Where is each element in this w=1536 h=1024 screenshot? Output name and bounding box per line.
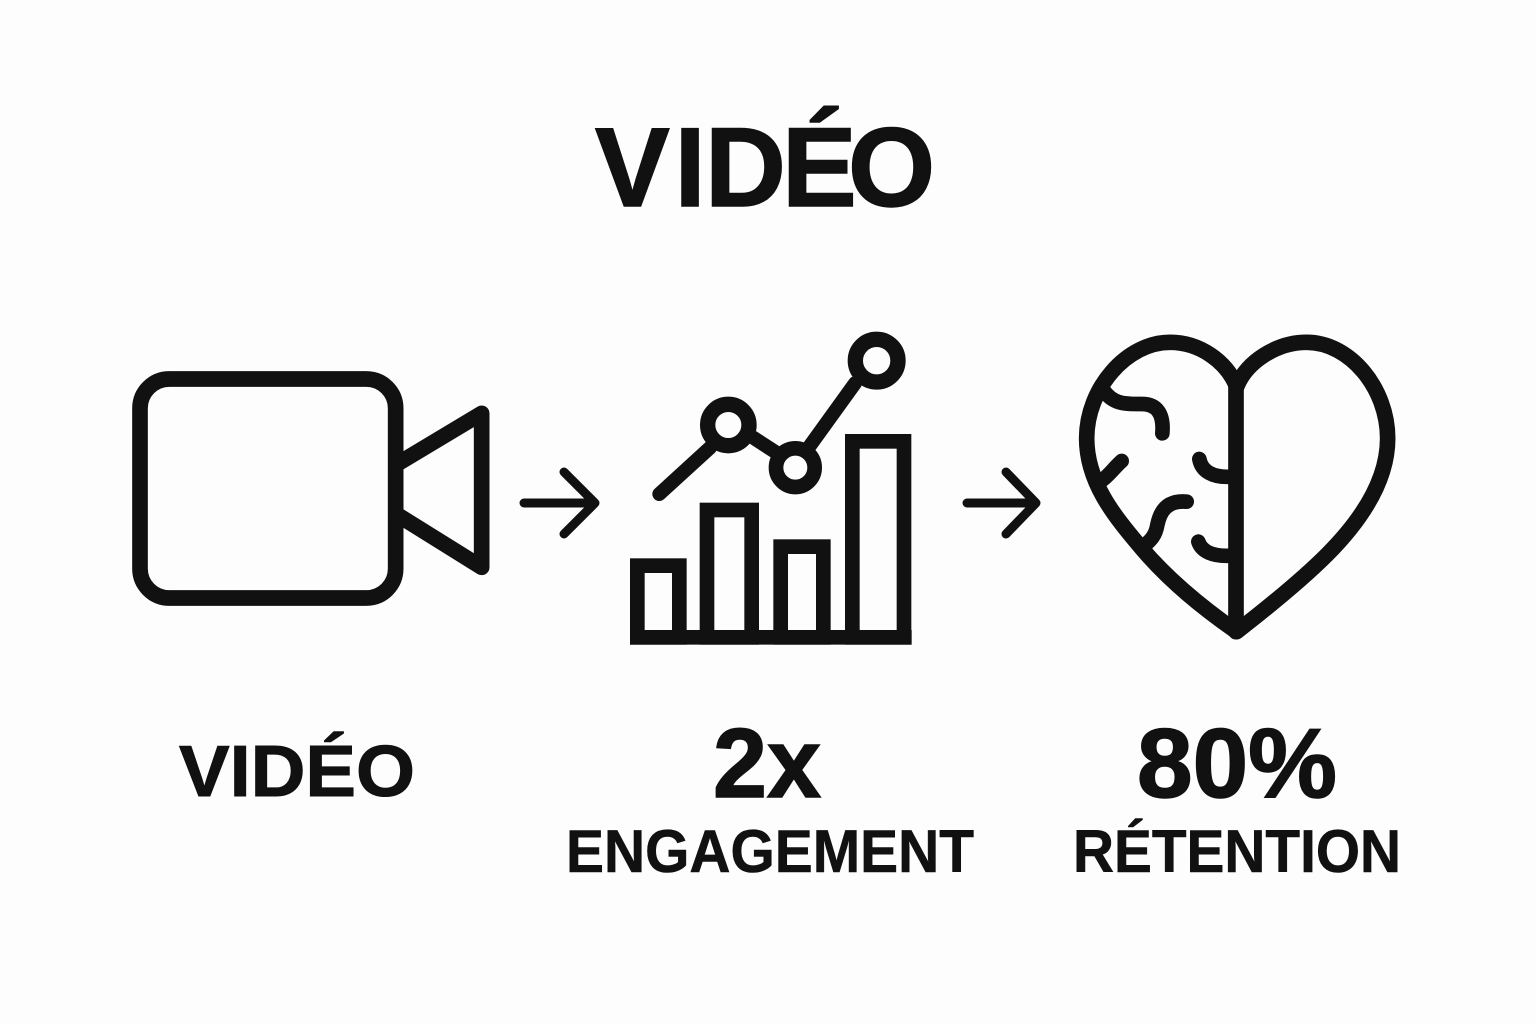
bars — [630, 441, 912, 637]
label: vidéo: VIDÉO — [179, 732, 415, 812]
label: engagement: ENGAGEMENT — [566, 818, 974, 885]
icon: heart brain — [1087, 342, 1388, 632]
arrow: engagement to retention — [967, 472, 1036, 534]
title: VIDÉO — [595, 105, 935, 230]
icon: video camera — [140, 379, 482, 598]
label: rétention: RÉTENTION — [1073, 818, 1401, 885]
brain folds — [1100, 390, 1230, 556]
line trend — [659, 339, 898, 494]
arrow: video to engagement — [524, 472, 595, 534]
stat: 80%: 80% — [1137, 708, 1337, 818]
icon: growth chart — [630, 339, 912, 637]
stat: 2x: 2x — [713, 708, 821, 818]
